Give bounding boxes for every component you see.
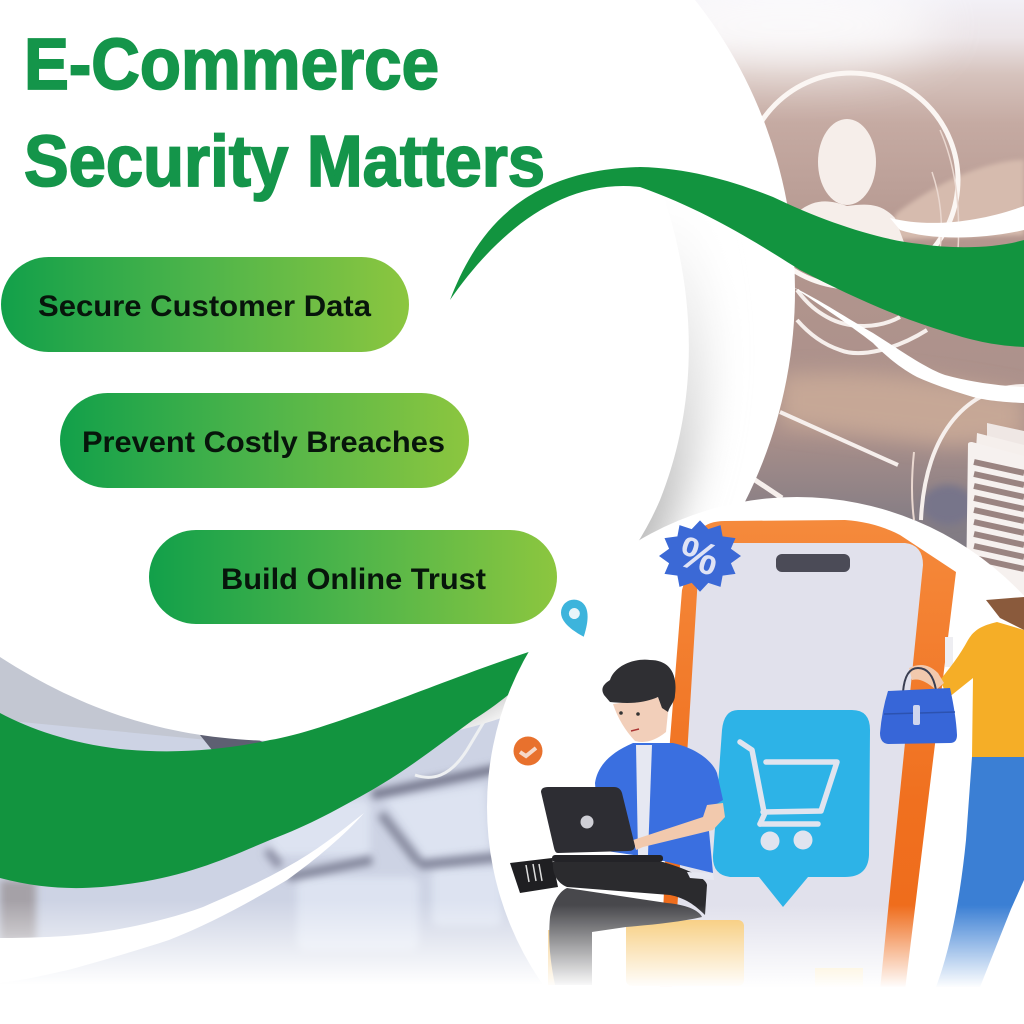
phone notch [776,554,850,572]
lower green wave [0,642,560,888]
bottom page band [0,987,1024,1024]
discount badge [659,520,741,592]
location pin icon [561,600,588,637]
shopping cart bubble [713,710,870,907]
phone body [660,520,956,990]
title: Security Matters [24,122,545,202]
seated man with laptop [510,660,725,985]
photo: finger touching security icons [696,0,1024,596]
discount badge: % [673,527,725,586]
woman with handbag [880,597,1024,987]
illustration bottom fade [548,908,1011,987]
illustration circle [480,490,1024,1010]
pill: Build Online Trust [149,530,557,624]
lower white swoosh [0,813,364,983]
shadow of inner white shape [460,266,718,730]
pill: Prevent Costly Breaches [60,393,469,488]
title: E-Commerce [24,25,439,105]
phone screen [672,543,923,990]
photo: blurred keyboard [0,657,534,972]
parcel boxes [548,920,863,988]
pill: Secure Customer Data [1,257,409,352]
outer white circle [0,0,795,740]
pill: Prevent Costly Breaches: Prevent Costly Breaches [82,426,445,459]
inner white shape [0,0,689,741]
pill: Build Online Trust: Build Online Trust [221,563,486,596]
top green wave [450,167,1024,347]
pill: Secure Customer Data: Secure Customer Data [38,290,371,323]
check badge icon [514,736,542,766]
title [24,25,545,202]
